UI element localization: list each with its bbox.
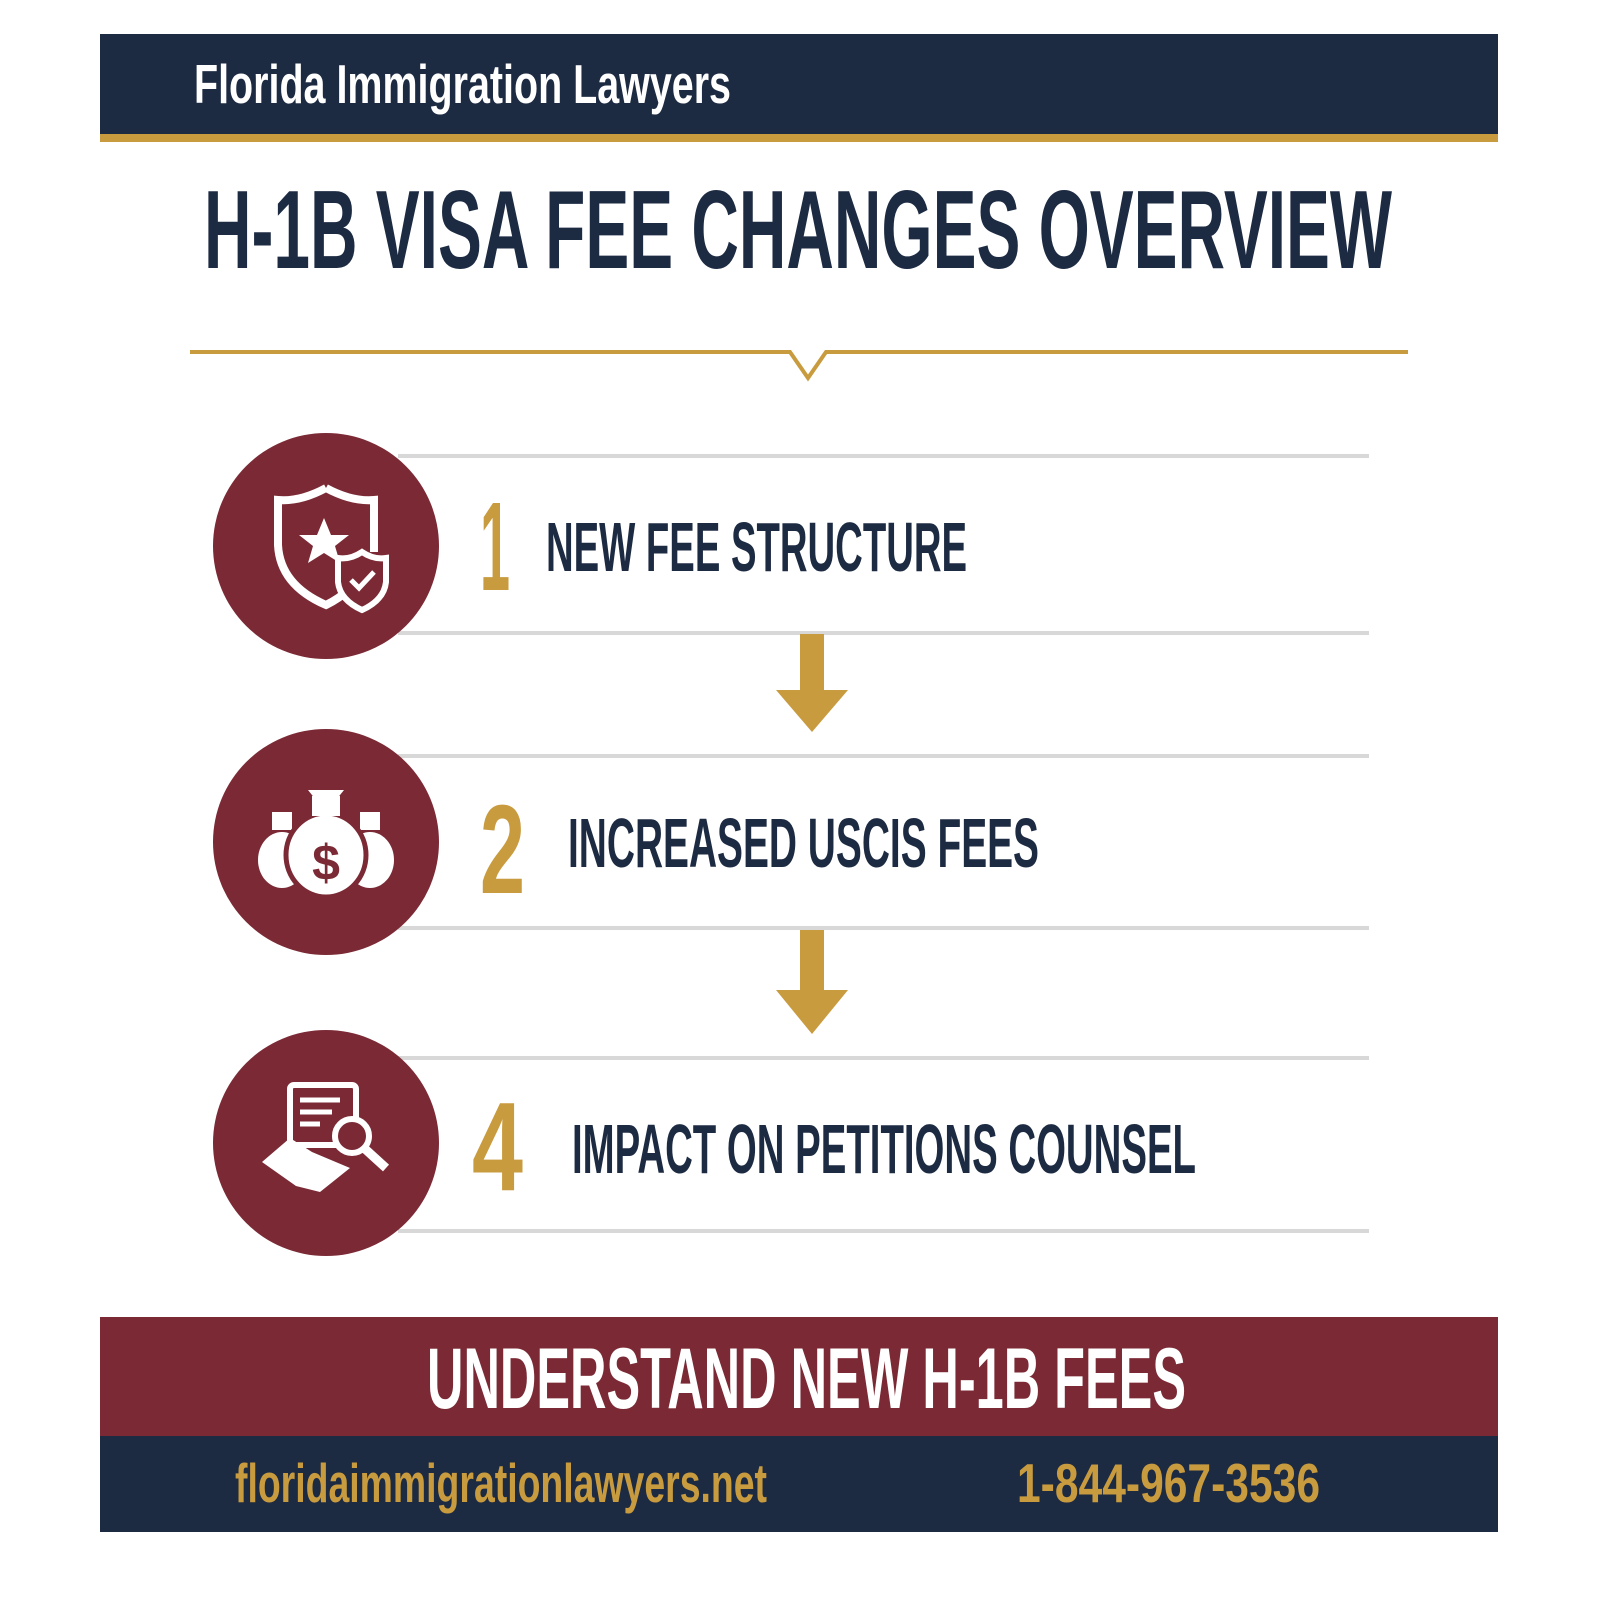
item 3 bbox=[213, 1030, 1196, 1256]
item 2 bbox=[213, 729, 1039, 955]
icon: handshake with magnifier bbox=[213, 1030, 439, 1256]
header text: Florida Immigration Lawyers bbox=[194, 53, 731, 115]
icon: shield bbox=[213, 433, 439, 659]
gray rule lines bbox=[398, 456, 1369, 1231]
item 1 bbox=[213, 433, 967, 659]
number 4: 4 bbox=[472, 1076, 523, 1217]
item 1: 1 bbox=[480, 476, 510, 617]
divider with chevron bbox=[190, 352, 1408, 378]
label 2: INCREASED USCIS FEES bbox=[568, 804, 1039, 882]
arrow 1 bbox=[776, 634, 848, 732]
label 1: NEW FEE STRUCTURE bbox=[546, 508, 967, 586]
number 2: 2 bbox=[480, 779, 525, 920]
contact bar bbox=[100, 1436, 1498, 1532]
icon: money bags: $ bbox=[312, 835, 340, 891]
arrow 2 bbox=[776, 930, 848, 1034]
website: floridaimmigrationlawyers.net bbox=[235, 1452, 767, 1514]
header bar bbox=[100, 34, 1498, 142]
footer banner bbox=[100, 1317, 1498, 1437]
icon: money bags bbox=[213, 729, 439, 955]
phone: 1-844-967-3536 bbox=[1017, 1452, 1320, 1514]
